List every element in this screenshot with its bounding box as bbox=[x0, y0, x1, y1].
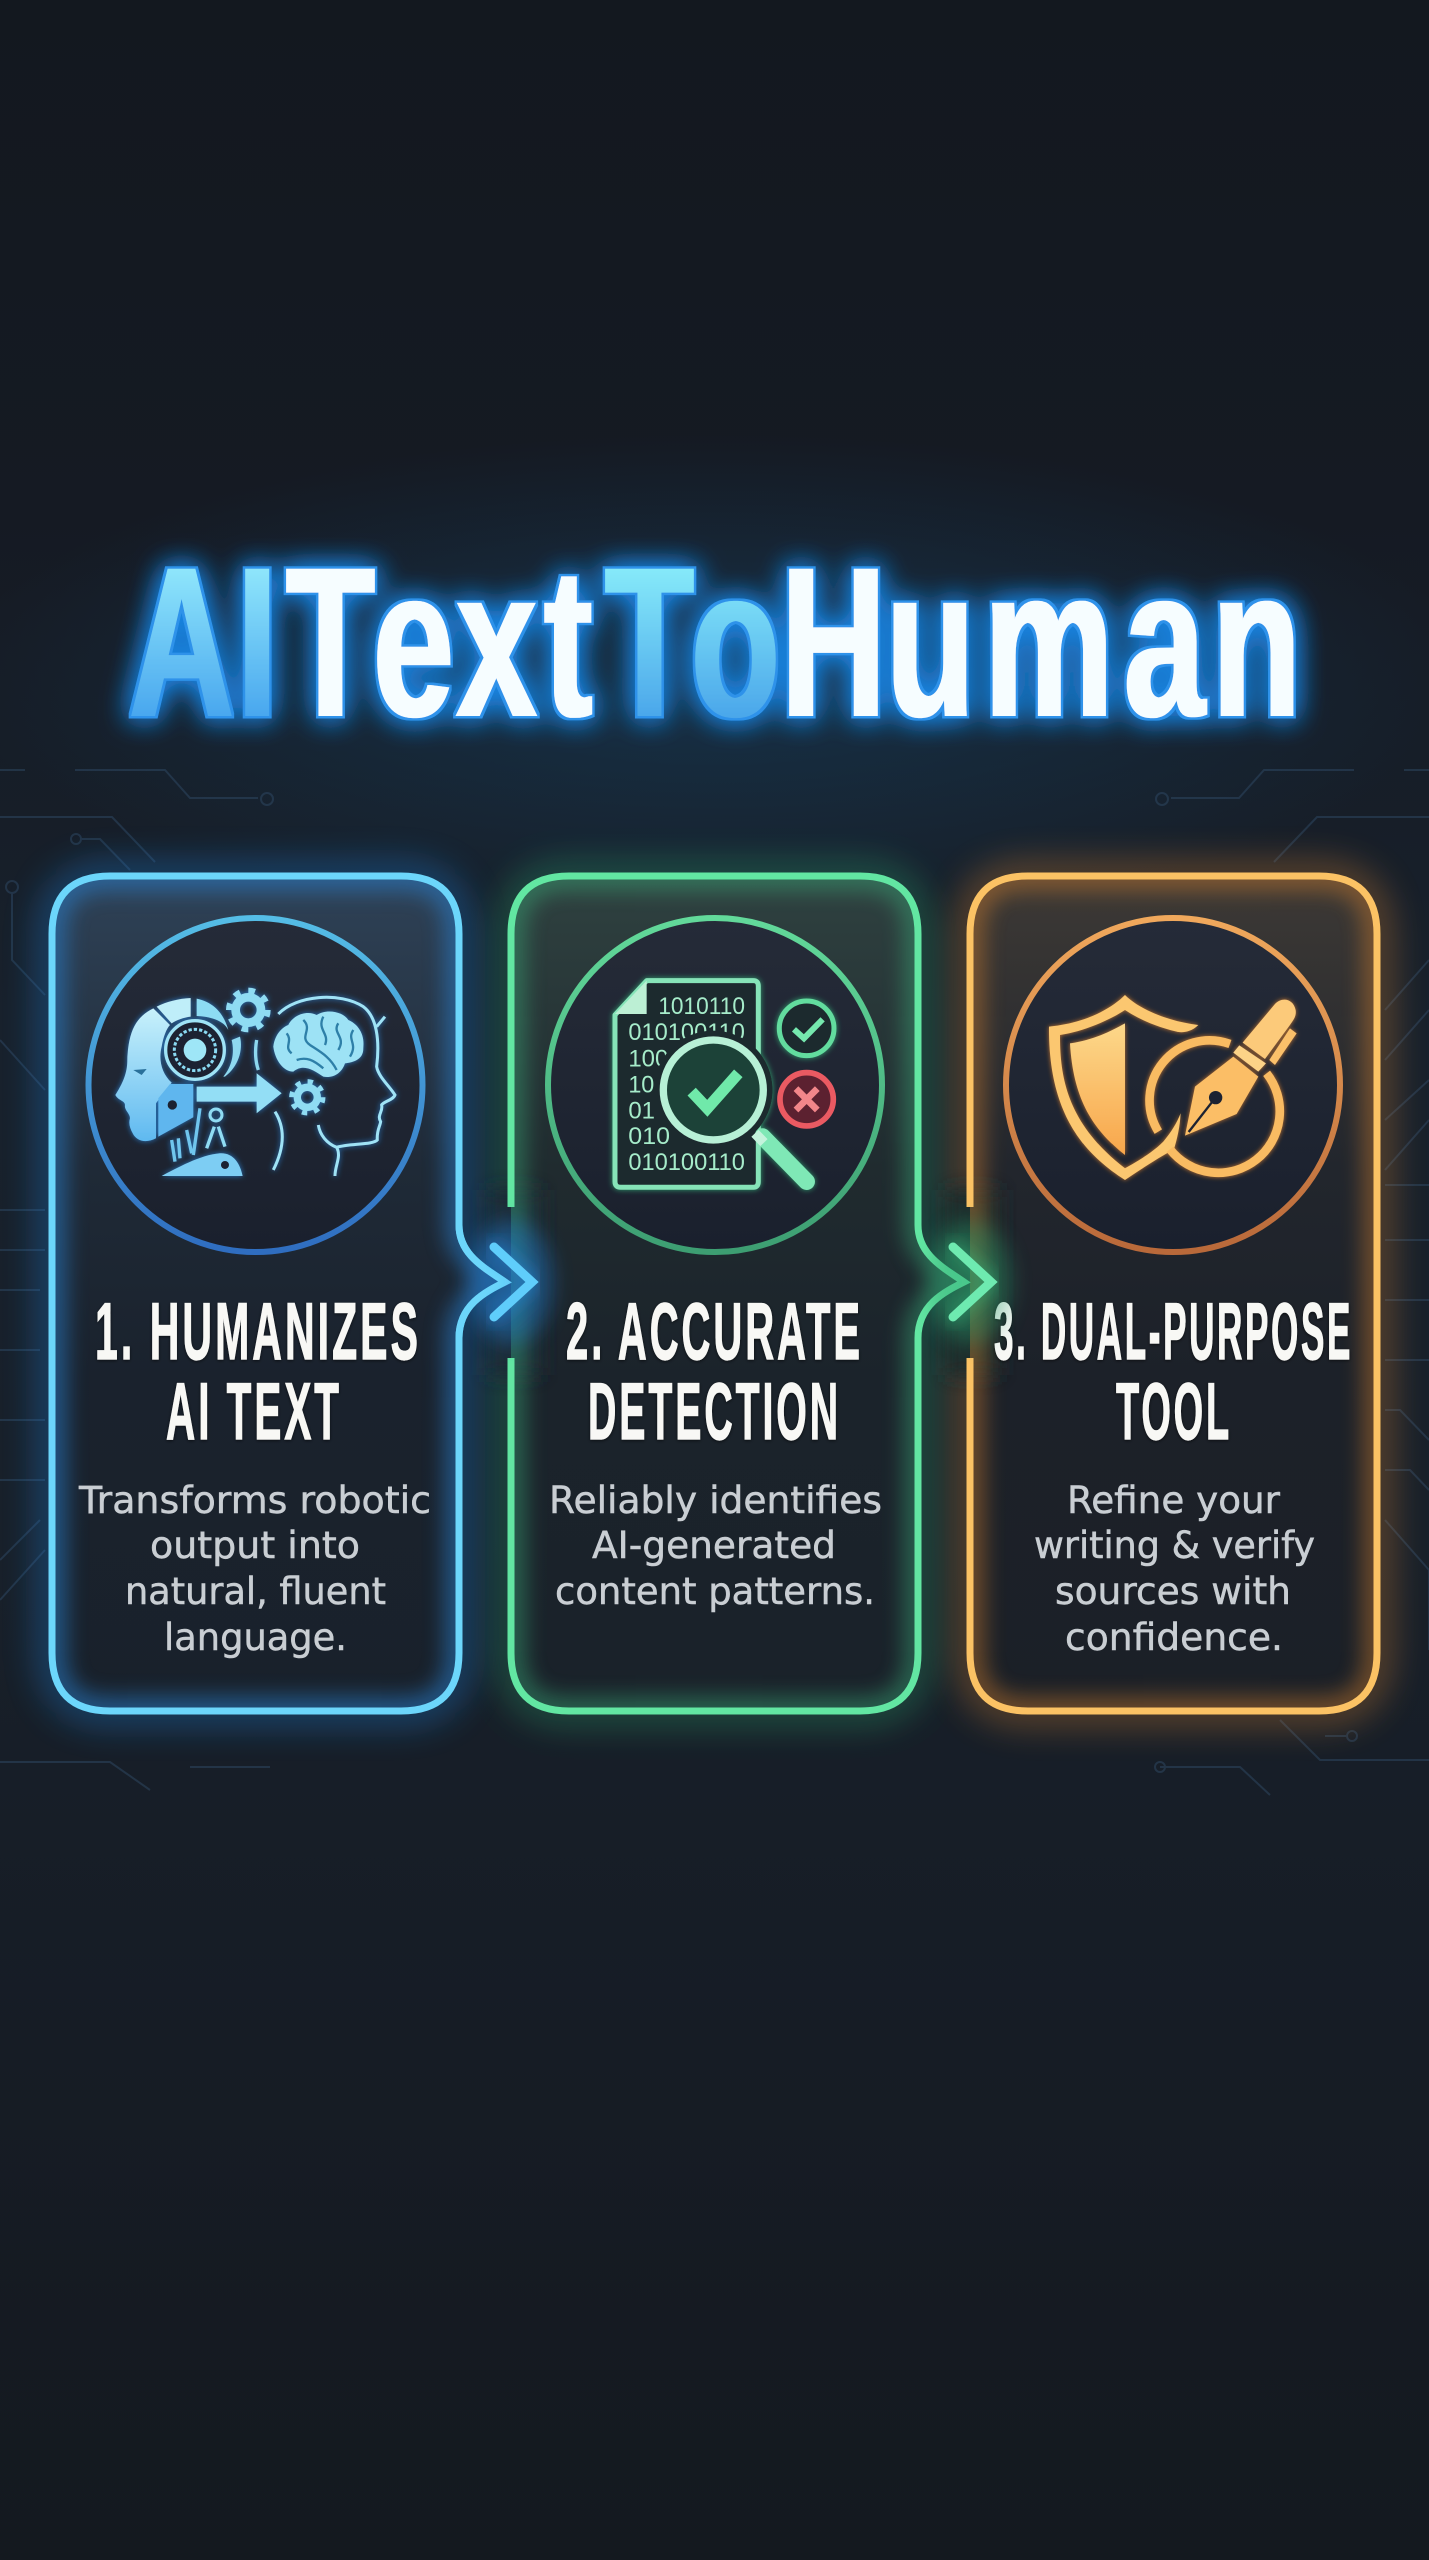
icon: binary document with magnifier bbox=[548, 918, 882, 1252]
description 2 bbox=[549, 1479, 882, 1613]
icon: binary document with magnifier: 010100110 bbox=[628, 1149, 745, 1176]
arrow: chevron from card 1 to card 2 bbox=[459, 1220, 553, 1344]
panel: 2. accurate detection bbox=[486, 876, 1012, 1711]
description 2: Reliably identifies bbox=[549, 1479, 882, 1522]
icon: binary document with magnifier: 01 bbox=[628, 1097, 655, 1124]
arrow: chevron from card 2 to card 3 bbox=[928, 1220, 1012, 1344]
heading 1: AI TEXT bbox=[166, 1367, 342, 1457]
heading 2: DETECTION bbox=[588, 1367, 841, 1457]
title: To bbox=[605, 522, 780, 762]
heading 1 bbox=[95, 1287, 421, 1457]
description 1: output into bbox=[150, 1524, 360, 1567]
description 1 bbox=[78, 1479, 431, 1659]
heading 3 bbox=[994, 1287, 1353, 1457]
card 3 frame bbox=[945, 876, 1377, 1711]
panel: 2. accurate detection: 2. ACCURATE bbox=[566, 1287, 863, 1377]
circuit pattern: left bbox=[0, 770, 273, 1790]
description 2: AI-generated bbox=[592, 1524, 836, 1567]
heading 3: TOOL bbox=[1116, 1367, 1232, 1457]
icon: binary document with magnifier: 10 bbox=[628, 1072, 654, 1099]
card 1 frame bbox=[52, 876, 505, 1711]
panel: 1. humanizes ai text bbox=[52, 876, 553, 1711]
description 3 bbox=[1034, 1479, 1315, 1659]
description 1: natural, fluent bbox=[125, 1570, 386, 1613]
title: Human bbox=[781, 522, 1301, 762]
description 1: language. bbox=[164, 1616, 347, 1659]
icon: robot head to human head bbox=[88, 918, 422, 1252]
title: AI bbox=[129, 522, 277, 762]
circuit pattern: right bbox=[1155, 770, 1429, 1795]
heading 2 bbox=[566, 1287, 863, 1457]
description 2: content patterns. bbox=[555, 1570, 875, 1613]
icon: binary document with magnifier: 1010110 bbox=[658, 993, 745, 1020]
icon: binary document with magnifier: 010100110 bbox=[628, 1019, 745, 1046]
description 1: Transforms robotic bbox=[78, 1479, 431, 1522]
title: Text bbox=[286, 522, 592, 762]
icon: shield and fountain pen bbox=[1006, 918, 1340, 1252]
panel: 3. dual-purpose tool bbox=[945, 876, 1377, 1711]
icon: binary document with magnifier: 010 bbox=[628, 1123, 670, 1150]
description 3: sources with bbox=[1055, 1570, 1291, 1613]
card 2 frame bbox=[486, 876, 964, 1711]
title bbox=[129, 522, 1301, 762]
description 3: confidence. bbox=[1065, 1616, 1283, 1659]
heading 1: 1. HUMANIZES bbox=[95, 1287, 421, 1377]
description 3: writing & verify bbox=[1034, 1524, 1315, 1567]
icon: binary document with magnifier: 100 bbox=[628, 1046, 668, 1073]
description 3: Refine your bbox=[1067, 1479, 1281, 1522]
